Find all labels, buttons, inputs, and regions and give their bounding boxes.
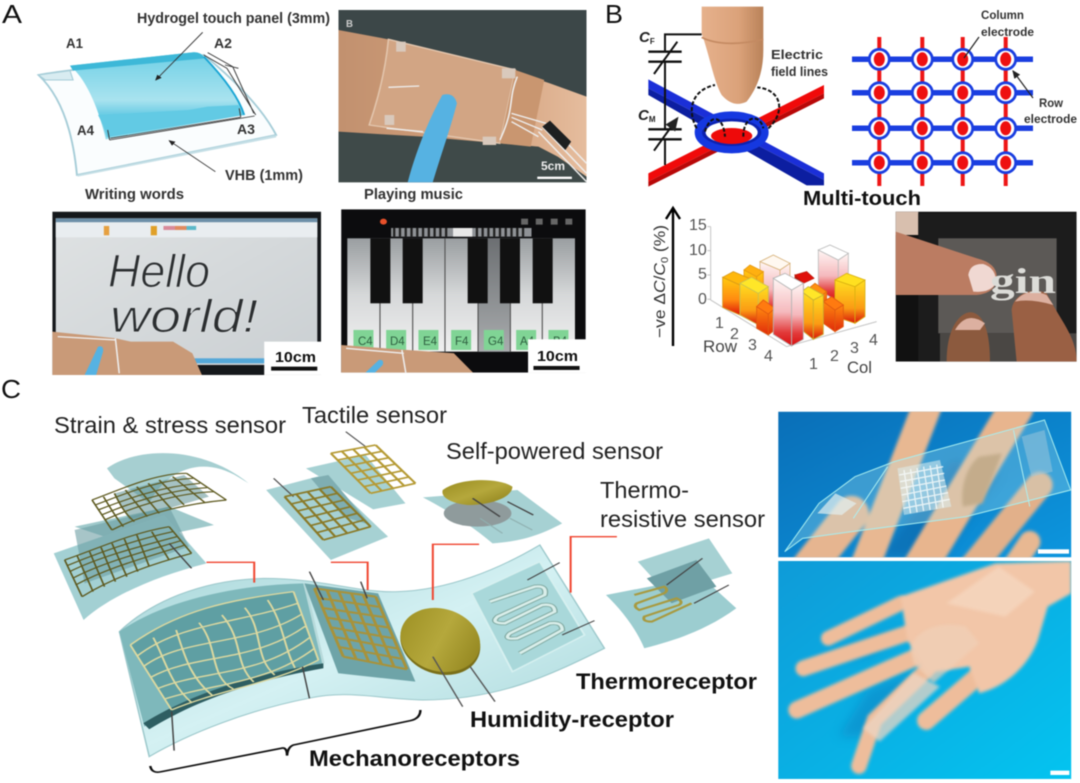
key labels: G4 [488,336,504,348]
y axis title: 0 [660,256,671,263]
panel: B capacitive multi-touch [605,0,1077,377]
axis tick labels: 3 [850,340,859,357]
label: row electrode: electrode [1024,114,1077,126]
label: self-powered sensor: Self-powered sensor [446,438,663,464]
label: hydrogel touch panel: Hydrogel touch panel (3mm) [137,10,330,27]
handwriting: world!: world! [110,290,258,342]
label: column electrode [981,10,1034,39]
axis tick labels: 5 [698,266,707,283]
mechanoreceptor: strain sensor [119,583,323,751]
diagram: finger on electrode ring [648,7,824,187]
bracket: mechanoreceptors [150,710,420,772]
label: C_M: M [649,115,656,124]
heading: multi-touch: Multi-touch [803,188,921,210]
label: A1: A1 [66,35,83,51]
y axis title: −ve ΔC/C [652,264,669,338]
axis tick labels: 0 [698,291,707,308]
key labels: F4 [455,336,469,348]
flexible substrate [119,545,604,757]
axis tick labels: 3 [748,337,757,354]
label: electric field lines [771,48,828,79]
photo: writing on screen [52,212,322,375]
key labels: E4 [423,336,438,348]
label: thermo-resistive sensor: resistive sensor [600,506,765,532]
y axis arrow [666,208,680,346]
panel: C skin-inspired sensors [1,374,1071,779]
photo: sensors on mannequin hand [778,561,1071,779]
mechanoreceptor: tactile sensor [304,572,415,682]
label: thermo-resistive sensor: Thermo- [600,477,689,503]
axis tick labels: 4 [764,348,773,365]
scale label 5cm: 5cm [541,159,565,173]
axis tick labels: 2 [730,326,739,343]
label: mechanoreceptors: Mechanoreceptors [309,746,520,771]
label: electric field lines: Electric [771,48,823,62]
tactile sensor exploded [266,432,415,560]
label: column electrode: electrode [981,27,1034,39]
axis tick labels: 1 [715,315,724,332]
panel letter C: C [1,374,21,404]
key labels: A4 [520,336,535,348]
scale label 10cm: 10cm [275,349,316,366]
label: A2: A2 [214,35,232,51]
label: C_F: F [650,37,655,46]
chart: 3D bar chart of capacitance change [652,208,878,377]
key labels: B4 [553,336,568,348]
label: electric field lines: field lines [771,65,828,79]
axis tick labels: 10 [689,242,707,259]
axis tick labels: 1 [809,356,818,373]
axis tick labels: 2 [830,348,839,365]
photo: touch panel on arm [338,10,587,182]
label: tactile sensor: Tactile sensor [302,402,447,428]
diagram: electrode grid [852,37,1033,186]
label: C_F: C [639,29,650,46]
label: row electrode [1024,98,1077,126]
axis tick labels [689,217,878,373]
label: strain and stress sensor: Strain & stress sensor [54,412,286,438]
handwriting: Hello: Hello [108,245,210,297]
photo: piano app [341,209,587,373]
photo: fingers on touch panel [896,212,1077,362]
label: thermo-resistive sensor [600,477,765,532]
photo: sensor film on mannequin fingers [778,407,1071,567]
heading: writing words: Writing words [85,186,184,203]
label: A3: A3 [237,121,255,137]
key labels: C4 [358,336,373,348]
y axis title: (%) [652,225,669,257]
key labels: D4 [390,336,405,348]
label: thermoreceptor: Thermoreceptor [576,669,757,694]
panel: A hydrogel touch panel [2,0,587,375]
panel text: gin: gin [990,261,1056,301]
arrow: to hydrogel panel [156,32,203,80]
photo label B: B [346,19,353,30]
scale box [528,339,587,373]
thermoreceptor serpentine [472,562,595,672]
humidity receptor disc [388,601,495,707]
diagram: hydrogel on VHB [38,32,276,177]
strain and stress sensor exploded [54,453,249,620]
scale label 10cm: 10cm [537,348,578,365]
diagram: sensor array [54,432,736,772]
heading: playing music: Playing music [364,186,463,203]
axis label: Col: Col [847,358,872,377]
label: row electrode: Row [1039,98,1063,110]
self-powered sensor exploded [423,480,562,543]
label: C_M: C [638,107,649,124]
label: VHB: VHB (1mm) [225,167,303,184]
red connector lines [206,537,617,600]
scale box [264,342,322,375]
arrow: to VHB layer [169,141,215,172]
axis tick labels: 15 [689,217,707,234]
label: A4: A4 [77,122,94,138]
axis label: Row: Row [703,337,738,356]
label: humidity-receptor: Humidity-receptor [470,707,674,732]
key labels [358,336,568,348]
label: column electrode: Column [981,10,1024,22]
thermo-resistive sensor exploded [606,538,736,648]
axis tick labels: 4 [869,332,878,349]
